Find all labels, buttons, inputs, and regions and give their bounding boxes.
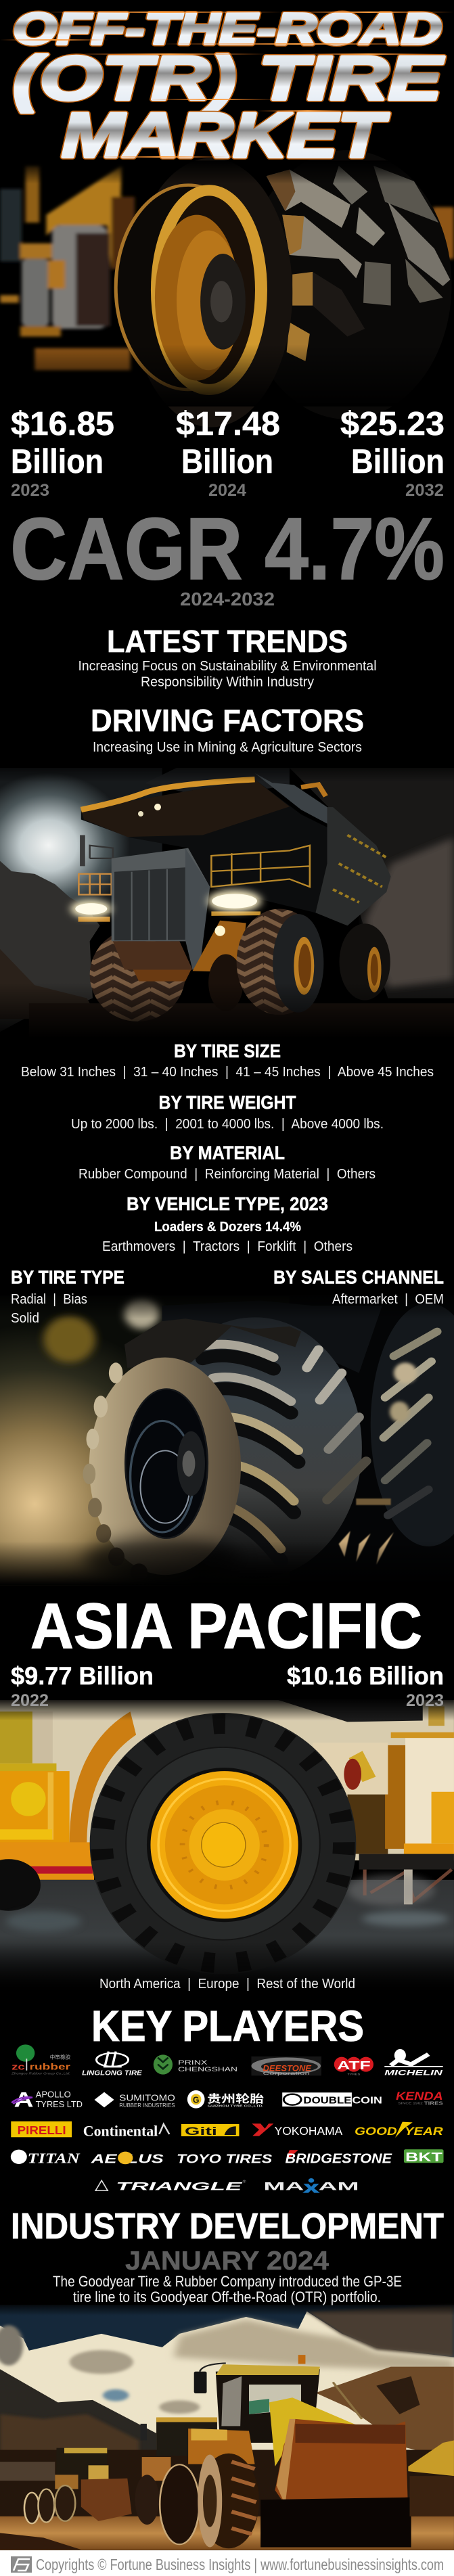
by material [78,1142,376,1182]
logo: Maxam: MA AM [263,2180,359,2193]
key players heading: KEY PLAYERS [91,2002,364,2050]
logo: ZC Rubber: Zhongce Rubber Group Co.,Ltd. [11,2072,70,2075]
by tire weight: BY TIRE WEIGHT [158,1092,296,1113]
logo: Triangle: ® [243,2180,246,2184]
truck dump bed [81,773,391,925]
title line 2: (OTR) TIRE [13,44,444,113]
logo: Yokohama: YOKOHAMA [275,2124,342,2138]
logo: Toyo Tires: TOYO TIRES [177,2152,273,2166]
logo: Kenda Tires: SINCE 1962 [398,2102,423,2105]
logo: Maxam [263,2178,359,2193]
logo: Sumitomo [94,2092,175,2109]
by material: Rubber Compound | Reinforcing Material | Others [78,1167,376,1182]
logo: Guizhou Tyre: 贵州轮胎 [207,2092,264,2104]
by sales channel [273,1266,444,1307]
by tire type: BY TIRE TYPE [11,1266,124,1288]
main tire tread [124,1317,366,1579]
rear tractor tire [371,1303,454,1546]
truck headlights [71,890,261,936]
logo: Triangle: TRIANGLE [116,2180,244,2193]
by tire type: Radial | Bias [11,1292,87,1307]
by tire type [11,1266,124,1326]
logo: Guizhou Tyre: GUIZHOU TYRE CO.,LTD. [208,2104,264,2108]
logo: Goodyear: GOOD YEAR [355,2125,443,2138]
latest trends: LATEST TRENDS [107,624,348,659]
title line 1: OFF-THE-ROAD [13,3,442,53]
truck right tires [208,909,390,1015]
excavator at right [408,2440,454,2516]
logo: Double Coin: DOUBLE [303,2094,351,2106]
logo: Apollo Tyres: A [14,2088,34,2112]
value 2023 [287,1662,444,1710]
logo: Kenda Tires: TIRES [424,2100,443,2106]
logo: Continental: Continental [83,2123,158,2140]
value 2022: $9.77 Billion [11,1662,154,1690]
logo: Giti [181,2124,239,2138]
driving factors [91,703,364,755]
logo: Deestone: DEESTONE [263,2064,312,2073]
logo: Apollo Tyres: APOLLO [36,2090,71,2100]
by tire size [21,1040,434,1080]
yellow machine wheel image [0,1697,454,1994]
logo: Titan: TITAN [28,2150,81,2167]
tire tread [243,150,452,419]
hero image: OTR tire close-up [0,150,454,427]
logo: ZC Rubber: zc [12,2063,25,2072]
logo: ZC Rubber: 中策橡胶 [50,2054,71,2060]
stat 2024: 2024 [208,481,246,500]
logo: Aeolus: AE LUS [91,2152,164,2166]
title line 1: OFF-THE-ROAD [13,3,442,53]
by vehicle type: Loaders & Dozers 14.4% [154,1220,301,1235]
large tire [90,1713,356,1975]
stat 2023 [11,406,114,500]
CAGR period: 2024-2032 [180,589,275,610]
logo: Double Coin [282,2092,382,2107]
Asia Pacific values [11,1662,444,1710]
title [0,3,454,170]
by material: BY MATERIAL [170,1142,285,1164]
clouds and dark sky [0,2305,454,2414]
loader middle [135,2417,217,2525]
title line 2: (OTR) TIRE [13,44,444,113]
tire sidewall [131,158,292,427]
by vehicle type: Earthmovers | Tractors | Forklift | Others [102,1239,353,1254]
logo: ATF Tyres: TYRES [347,2073,361,2075]
logo: Deestone: Corporation [263,2072,310,2076]
stat 2032: 2032 [405,481,444,500]
stat 2032: Billion [351,442,445,480]
logo: ZC Rubber: rubber [30,2063,70,2072]
latest trends [78,624,376,690]
other regions: North America | Europe | Rest of the World [99,1977,355,1992]
wheel rim [116,185,261,390]
truck left tire [90,928,185,1021]
tire rim [125,1389,208,1538]
stat 2023: $16.85 [11,406,114,442]
logo: Bridgestone: BRIDGESTONE [285,2150,392,2166]
stat 2032: $25.23 [340,406,445,442]
logo: ATF Tyres: ATF [337,2059,371,2072]
logo: Triangle [95,2180,246,2193]
logo: Pirelli: PIRELLI [18,2123,66,2137]
value 2022 [11,1662,154,1710]
by tire type: Solid [11,1311,39,1326]
stat 2023: Billion [11,442,104,480]
stat 2032 [340,406,445,500]
title line 3: MARKET [62,99,390,170]
value 2023: $10.16 Billion [287,1662,444,1690]
footer logo [11,2556,32,2573]
logo: Sumitomo: SUMITOMO [119,2093,175,2103]
goodyear development text [53,2273,402,2305]
title line 3: MARKET [62,99,390,170]
market value stats [11,406,445,500]
by tire size: BY TIRE SIZE [174,1040,281,1061]
truck grille [112,848,210,982]
stat 2024 [176,406,280,500]
logo: Michelin: MICHELIN [384,2069,443,2077]
by vehicle type [102,1193,353,1254]
logo: Prinx Chengshan [154,2054,237,2075]
driving factors: Increasing Use in Mining & Agriculture Sectors [93,740,362,755]
logo: ATF Tyres [334,2057,373,2075]
tractor tire image [0,1290,454,1585]
logo: Guizhou Tyre: G [193,2095,199,2105]
key player logos [11,2044,444,2193]
logo: Michelin [384,2049,443,2077]
logo: Linglong Tire [82,2052,142,2077]
logo: Guizhou Tyre [187,2090,264,2109]
logo: Linglong Tire: LINGLONG TIRE [82,2069,142,2077]
truck bed overhang lights [138,804,161,816]
logo: Sumitomo: RUBBER INDUSTRIES [119,2102,175,2109]
driving factors: DRIVING FACTORS [91,703,364,738]
logo: ZC Rubber [11,2044,71,2075]
goodyear development text: The Goodyear Tire & Rubber Company introduced the GP-3E [53,2273,402,2290]
logo: BKT: BKT [405,2150,442,2164]
tractor undercarriage glints [339,1498,394,1565]
logo: Giti: Giti [185,2125,217,2138]
value 2022: 2022 [11,1691,49,1710]
construction loaders image [0,2301,454,2550]
yellow wheel rim [151,1771,298,1918]
logo: Prinx Chengshan: CHENGSHAN [178,2066,237,2073]
latest trends: Responsibility Within Industry [141,675,314,690]
truck orange frame [193,921,246,972]
latest trends: Increasing Focus on Sustainability & Environmental [78,659,376,674]
by vehicle type: BY VEHICLE TYPE, 2023 [127,1193,328,1214]
loader far left [24,2448,132,2523]
logo: Deestone [251,2056,321,2076]
logo: Prinx Chengshan: PRINX [178,2059,207,2067]
loader main [160,2355,411,2548]
by tire size: Below 31 Inches | 31 – 40 Inches | 41 – 45 Inches | Above 45 Inches [21,1065,434,1080]
by tire weight: Up to 2000 lbs. | 2001 to 4000 lbs. | Above 4000 lbs. [71,1117,384,1132]
logo: Titan [11,2150,81,2167]
logo: Yokohama [252,2123,342,2138]
development date: JANUARY 2024 [125,2247,329,2276]
value 2023: 2023 [406,1691,444,1710]
logo: Apollo Tyres [12,2088,83,2112]
by sales channel: Aftermarket | OEM [332,1292,444,1307]
logo: Apollo Tyres: TYRES LTD [36,2100,83,2109]
tire sidewall [83,1358,241,1583]
logo: Double Coin: COIN [352,2094,382,2106]
mining dump truck image [0,759,454,1038]
logo: Kenda Tires: KENDA [396,2090,443,2102]
stat 2024: $17.48 [176,406,280,442]
by tire weight [71,1092,384,1132]
stat 2023: 2023 [11,481,49,500]
goodyear development text: tire line to its Goodyear Off-the-Road (OTR) portfolio. [73,2288,381,2305]
footer bar [0,2550,454,2576]
stat 2024: Billion [181,442,273,480]
truck railings [78,835,310,894]
Asia Pacific heading: ASIA PACIFIC [30,1590,422,1662]
